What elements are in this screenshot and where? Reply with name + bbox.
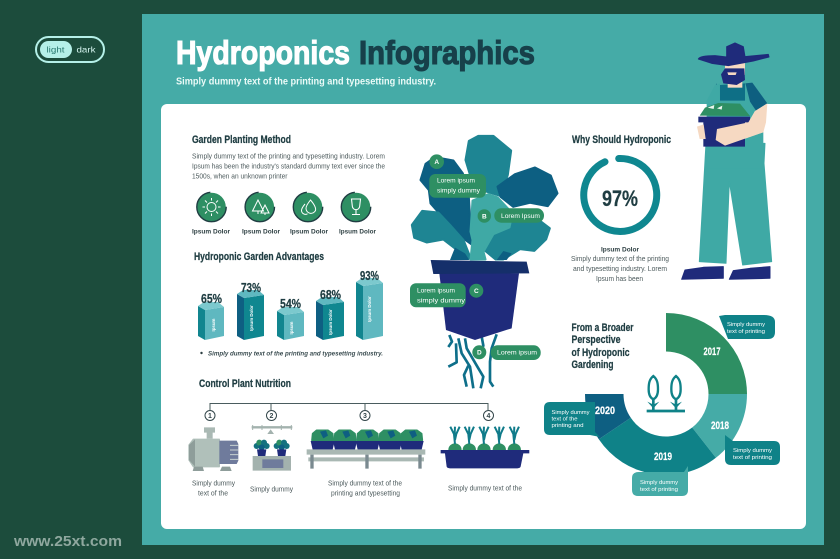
step captions: Simply dummy [192,478,235,488]
panel: garden planting method [192,134,385,236]
label A: simply dummy [437,188,481,194]
icon: glass [341,192,371,222]
icon labels: Ipsum Dolor [339,228,376,236]
gauge caption: Ipsum Dolor [601,246,639,254]
step captions: Simply dummy text of the [328,478,402,488]
heading: broader perspective: of Hydroponic [572,347,630,359]
callout 2019 [632,466,688,496]
panel: why should hydroponic [571,134,671,283]
bar 73% [237,280,264,340]
bar 73%: 73% [241,280,261,295]
step connector with numbers: 3 [363,413,367,420]
bar 68% [316,287,344,340]
panel: hydroponic garden advantages [194,251,383,358]
heading: broader perspective: Gardening [572,359,614,371]
icon: plant sprouts [647,376,685,411]
bar 65%: Ipsum [211,318,216,331]
donut segment 2020 [585,394,631,439]
label A: Lorem ipsum [437,178,475,184]
callout 2019: text of printing [640,487,678,493]
heading: garden planting method: Garden Planting Method [192,134,291,146]
bar 93% [356,268,383,340]
illustration: farmer [682,43,772,279]
bullet note: Simply dummy text of the printing and typesetting industry. [208,350,383,358]
bar 54%: Ipsum [289,321,294,334]
icon: trees [245,192,274,222]
panel: control plant nutrition [189,378,529,498]
callout 2019: Simply dummy [640,480,678,486]
panel: broader perspective timeline [544,313,780,496]
step captions: Simply dummy text of the [448,484,522,492]
label D [472,345,541,360]
watermark: www.25xt.com [13,534,122,550]
icon labels: Ipsum Dolor [192,228,230,236]
gauge 97% [584,158,657,231]
heading: broader perspective [572,322,634,371]
plant shapes [412,136,557,340]
step captions: text of the [198,488,228,498]
subtitle: Simply dummy text of the printing and typesetting industry. [176,76,436,88]
icon labels: Ipsum Dolor [290,228,328,236]
bar 65%: 65% [201,291,222,306]
callout 2017 [719,315,775,339]
bar 73%: Ipsum Dolor [249,305,254,331]
label A [429,154,486,198]
icon: water drops [293,192,323,222]
donut segment 2017 [666,313,747,394]
heading: control plant nutrition: Control Plant Nutrition [199,378,291,390]
label A: A [434,159,439,166]
callout 2018 [725,435,780,465]
bar 93%: 93% [360,268,379,283]
main panel background [142,14,824,545]
description text: Simply dummy text of the printing and typesetting industry. Lorem [192,152,385,160]
gauge caption [571,246,669,283]
gauge 97%: 97% [602,186,638,211]
description text: 1500s, when an unknown printer [192,172,288,180]
donut segment 2020: 2020 [595,405,615,417]
callout 2018: text of printing [733,455,772,461]
farmer torso, box and head [697,43,769,168]
title [176,34,535,71]
label D: Lorem ipsum [497,350,538,357]
theme toggle [36,37,104,62]
bar 54%: 54% [280,296,301,311]
title: Hydroponics [176,34,350,71]
donut segment 2017: 2017 [704,346,720,358]
heading: broader perspective: From a Broader [572,322,634,334]
icon: sun [197,192,226,222]
donut segment 2018 [692,394,747,458]
description text [192,152,385,180]
bar 54% [277,296,304,340]
illustration: sprinkler and planter [252,425,292,471]
gauge caption: Ipsum has been [596,274,643,283]
step connector with numbers: 2 [270,413,274,420]
label C: Lorem ipsum [417,288,455,294]
illustration: pump [189,427,238,471]
callout 2020: Simply dummy [552,410,590,416]
gauge caption: and typesetting industry. Lorem [573,264,667,273]
illustration: long tray [441,427,529,468]
label C [410,283,483,307]
bar 93%: Ipsum Dolor [367,296,372,322]
step captions: Simply dummy [250,484,293,494]
callout 2020: text of the [552,416,578,422]
label B [478,208,544,223]
heading: why should hydroponic: Why Should Hydroponic [572,134,671,146]
step captions: printing and typesetting [331,488,400,498]
callout 2020 [544,402,600,437]
theme toggle: light [46,44,65,54]
step connector with numbers [205,404,494,420]
icon labels [192,228,376,236]
donut segment 2018: 2018 [711,420,729,432]
label C: simply dummy [417,298,466,304]
bar 68%: Ipsum Dolor [328,309,333,335]
label B: Lorem Ipsum [501,213,541,220]
callout 2017: Simply dummy [727,322,765,328]
step captions [192,478,522,498]
gauge caption: Simply dummy text of the printing [571,254,669,263]
callout 2018: Simply dummy [733,448,772,454]
bar 68%: 68% [320,287,341,302]
heading: advantages: Hydroponic Garden Advantages [194,251,324,263]
icon labels: Ipsum Dolor [242,228,280,236]
donut segment 2019 [599,418,716,475]
label C: C [474,288,479,295]
heading: broader perspective: Perspective [572,334,620,346]
callout 2017: text of printing [727,329,765,335]
callout 2020: printing and [552,423,584,429]
farmer legs and shoes [682,143,772,279]
theme toggle: dark [76,44,96,54]
label D: D [477,350,482,357]
step connector with numbers: 1 [208,413,212,420]
description text: Ipsum has been the industry's standard dummy text ever since the [192,162,385,170]
roots [448,334,497,388]
illustration: plant rack [307,430,425,469]
bar 65% [198,291,224,340]
step connector with numbers: 4 [487,413,491,420]
white content card [161,104,806,529]
illustration: potted plant with labels [410,136,557,388]
title: Infographics [359,34,535,71]
donut segment 2019: 2019 [654,451,672,463]
label B: B [482,213,487,220]
